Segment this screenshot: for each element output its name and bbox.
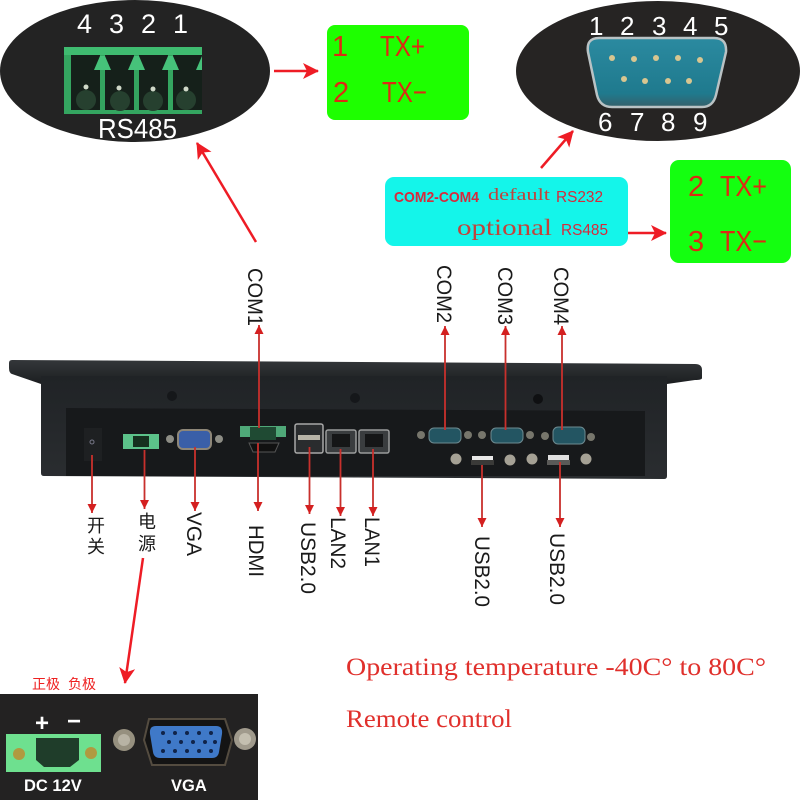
icon: COM2 port xyxy=(417,428,472,443)
pin numbers: 5 xyxy=(714,11,728,41)
icon: VGA detail port xyxy=(113,719,256,765)
icon: power switch xyxy=(84,428,102,461)
panel: power and VGA detail photo: − xyxy=(67,708,81,735)
icon: COM3 port xyxy=(478,428,534,443)
DC label: DC 12V xyxy=(24,777,82,795)
port labels: LAN1 xyxy=(360,517,383,567)
pin numbers: 3 xyxy=(652,11,666,41)
icon: green power connector xyxy=(6,734,101,772)
icon: power connector xyxy=(123,434,159,449)
arrow: RS485 to pin table xyxy=(274,70,318,72)
arrow: COM1 to RS485 photo xyxy=(197,143,256,242)
callout: COM port mode: optional xyxy=(457,215,552,240)
panel: rear view of device xyxy=(9,360,702,479)
panel: DB9 connector photo: 8 xyxy=(661,107,675,137)
port labels: COM2 xyxy=(432,265,455,323)
text: operating temperature: Operating temperature -40C° to 80C° xyxy=(346,654,766,681)
plus and minus: + xyxy=(35,710,49,737)
panel: DB9 connector photo: 9 xyxy=(693,107,707,137)
arrows: port connectors xyxy=(92,325,562,527)
port labels: 关 xyxy=(87,533,105,559)
port labels: 开 xyxy=(87,512,105,538)
panel: DB9 connector photo xyxy=(516,1,800,141)
callout: COM port mode: default xyxy=(488,185,550,204)
icon: LAN1 port xyxy=(359,430,389,453)
icon: COM1 terminal xyxy=(240,426,286,440)
icon: LAN2 port xyxy=(326,430,356,453)
port labels: USB2.0 xyxy=(470,536,493,607)
panel: DB9 connector photo: 7 xyxy=(630,107,644,137)
port labels: 电 xyxy=(138,508,156,534)
icon: VGA port xyxy=(166,430,223,449)
callout: COM port mode xyxy=(385,177,628,246)
panel: COM pin table: TX− xyxy=(720,226,767,258)
panel: RS485 pin table: 2 xyxy=(333,77,349,109)
icon: front USB ports and screws xyxy=(450,454,592,466)
port labels: COM1 xyxy=(243,268,266,326)
panel: RS485 pin table: TX+ xyxy=(380,31,425,63)
callout: COM port mode: RS232 xyxy=(556,189,603,206)
port labels: HDMI xyxy=(244,525,267,577)
polarity labels: 正极 xyxy=(32,676,60,692)
icon: USB stack xyxy=(295,424,323,453)
arrow: power to detail photo xyxy=(125,558,143,683)
panel: RS485 pin table: TX− xyxy=(382,77,427,109)
pin numbers: 1 xyxy=(589,11,603,41)
panel: power and VGA detail photo: 负极 xyxy=(68,676,96,692)
icon: green terminal block xyxy=(64,47,202,114)
pin numbers: 2 xyxy=(620,11,634,41)
port labels: LAN2 xyxy=(326,517,349,569)
icon: DB9 port xyxy=(588,38,726,107)
panel: DB9 connector photo: 6 xyxy=(598,107,612,137)
port labels: COM3 xyxy=(493,267,516,325)
arrow: to DB9 connector xyxy=(541,131,573,168)
panel: COM pin table: 3 xyxy=(688,226,704,258)
callout: COM port mode: RS485 xyxy=(561,222,608,239)
panel: RS485 pin table xyxy=(327,25,469,120)
port labels: USB2.0 xyxy=(296,522,319,594)
callout: COM port mode: COM2-COM4 xyxy=(394,189,480,206)
panel: COM pin table xyxy=(670,160,791,263)
icon: COM4 port xyxy=(541,427,595,444)
panel: COM pin table: TX+ xyxy=(720,171,767,203)
pin numbers: 3 xyxy=(109,9,124,39)
panel: RS485 pin table: 1 xyxy=(332,31,348,63)
port labels: USB2.0 xyxy=(545,533,568,605)
VGA label: VGA xyxy=(171,777,207,795)
pin numbers: 2 xyxy=(141,9,156,39)
port labels: COM4 xyxy=(549,267,572,325)
port labels xyxy=(87,265,572,607)
port labels: 源 xyxy=(138,530,156,556)
pin numbers: 1 xyxy=(173,9,188,39)
connector label: RS485 xyxy=(98,113,177,144)
panel: RS485 connector photo xyxy=(0,0,270,144)
panel: power and VGA detail photo xyxy=(0,676,258,800)
port labels: VGA xyxy=(182,512,205,556)
pin numbers: 4 xyxy=(683,11,697,41)
icon: HDMI port xyxy=(249,443,279,452)
arrow: to COM pin table xyxy=(628,232,666,234)
text: remote control: Remote control xyxy=(346,706,512,733)
panel: COM pin table: 2 xyxy=(688,171,704,203)
pin numbers: 4 xyxy=(77,9,92,39)
